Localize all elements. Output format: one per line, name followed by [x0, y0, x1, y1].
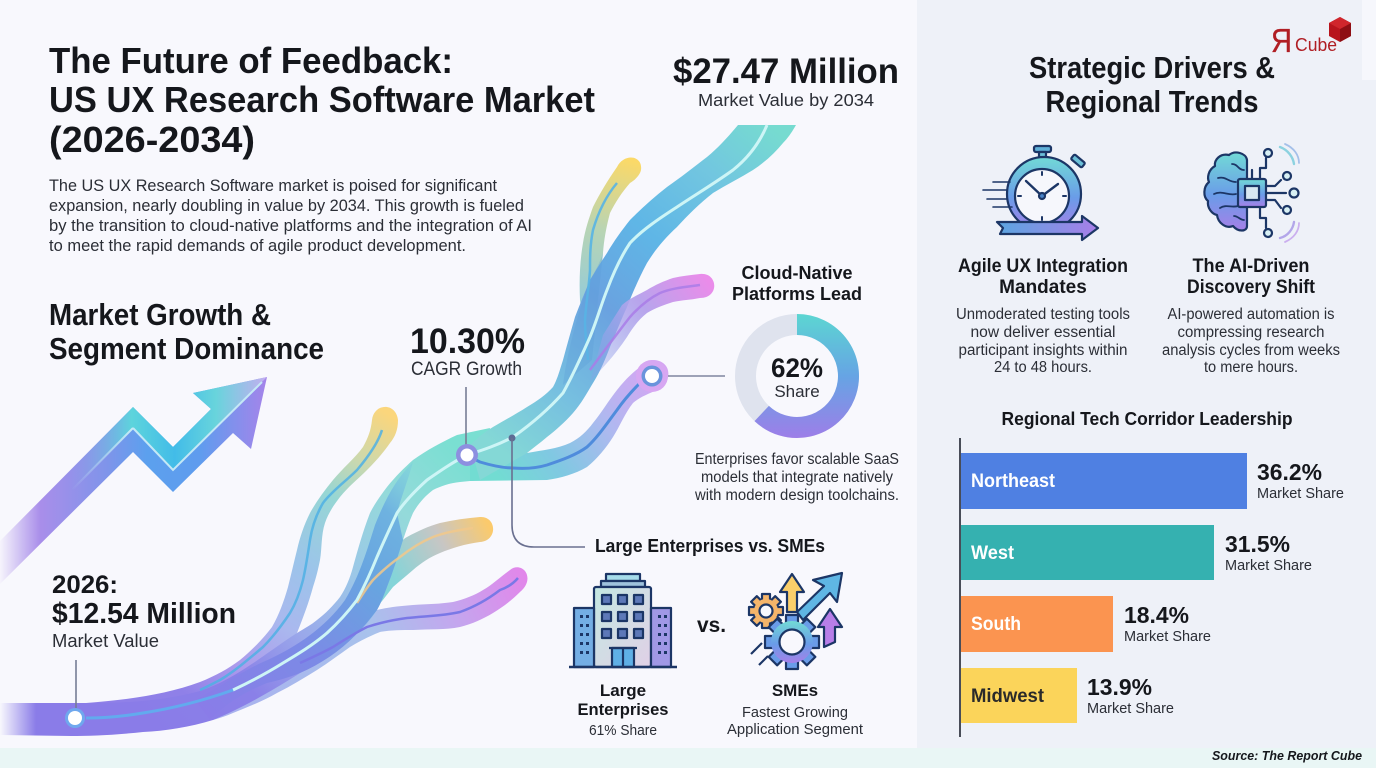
text: 2026 value: 2026:	[52, 571, 118, 599]
ribbon: left yellow branch	[86, 407, 398, 712]
ribbon: upper main	[470, 125, 796, 480]
intro text: expansion, nearly doubling in value by 2034. This growth is fueled	[49, 197, 524, 215]
text: 2026 value	[52, 571, 236, 651]
heading: strategic drivers: Regional Trends	[1046, 85, 1258, 119]
node: cloud-native marker	[636, 360, 725, 392]
ribbon: top pink branch	[590, 274, 714, 382]
driver: agile UX: now deliver essential	[970, 324, 1116, 341]
text: large enterprises	[578, 681, 668, 739]
node: CAGR marker	[456, 387, 478, 466]
ribbon: core line start	[86, 690, 233, 718]
driver: AI-driven: Discovery Shift	[1187, 277, 1316, 298]
bar: northeast	[961, 453, 1344, 509]
driver: agile UX	[956, 256, 1130, 376]
heading: market growth	[49, 297, 324, 366]
heading: cloud-native: Platforms Lead	[732, 284, 862, 304]
logo: RCube: Я	[1271, 22, 1292, 59]
text: 2034 value: $27.47 Million	[673, 52, 899, 91]
source note: Source: The Report Cube	[1212, 748, 1362, 763]
text: SMEs: Application Segment	[727, 721, 864, 738]
text: 2034 value	[673, 52, 899, 110]
heading: cloud-native: Cloud-Native	[741, 263, 853, 283]
text: 2026 value: $12.54 Million	[52, 598, 236, 630]
bar: midwest: Midwest	[971, 686, 1045, 707]
driver: AI-driven: AI-powered automation is	[1168, 306, 1335, 323]
driver: AI-driven: analysis cycles from weeks	[1162, 342, 1340, 359]
bar: west: Market Share	[1225, 557, 1312, 574]
bar chart: regional share	[960, 438, 1344, 737]
driver: AI-driven: compressing research	[1178, 324, 1324, 341]
text: enterprises favor: with modern design toolchains.	[694, 487, 899, 504]
intro text: The US UX Research Software market is poised for significant	[49, 177, 497, 195]
bar: south: Market Share	[1124, 628, 1211, 645]
text: 2034 value: Market Value by 2034	[698, 90, 874, 110]
ribbon: lower pink branch	[213, 567, 527, 720]
driver: AI-driven: The AI-Driven	[1192, 256, 1310, 277]
title: (2026-2034)	[49, 119, 255, 160]
node: 2026 marker	[65, 660, 85, 728]
text: CAGR: CAGR Growth	[411, 359, 522, 380]
bar: midwest	[961, 668, 1174, 723]
text: CAGR	[410, 322, 525, 380]
icon: growth arrow	[0, 377, 267, 584]
ribbon: bright core line	[233, 125, 767, 690]
bar: west	[961, 525, 1312, 580]
bar: northeast: 36.2%	[1257, 459, 1322, 485]
driver: AI-driven: to mere hours.	[1204, 359, 1298, 376]
connector: to enterprises vs SMEs	[508, 434, 585, 547]
bar: midwest: Market Share	[1087, 700, 1174, 717]
text: enterprises favor: Enterprises favor scalable SaaS	[695, 451, 899, 468]
ribbon: node purple branch	[470, 360, 668, 481]
intro text: by the transition to cloud-native platforms and the integration of AI	[49, 217, 532, 235]
ribbon: orange branch	[375, 517, 493, 610]
text: enterprises favor	[694, 451, 899, 504]
driver: agile UX: Mandates	[999, 277, 1087, 298]
bar: midwest: 13.9%	[1087, 674, 1152, 700]
heading: cloud-native	[732, 263, 862, 304]
text: large enterprises: Enterprises	[578, 700, 668, 719]
bar: west: West	[971, 543, 1015, 564]
ribbon: lower main	[0, 428, 490, 736]
donut chart: 62% share: 62%	[771, 353, 823, 383]
bar: south: 18.4%	[1124, 602, 1189, 628]
logo: RCube	[1271, 17, 1351, 59]
ribbon: upper overlap shade	[563, 253, 603, 385]
driver: agile UX: participant insights within	[958, 342, 1128, 359]
title	[49, 40, 595, 160]
heading: regional: Regional Tech Corridor Leadership	[1002, 408, 1292, 429]
icon: gears and growth arrows	[749, 573, 842, 669]
title: The Future of Feedback:	[49, 40, 453, 81]
bar: west: 31.5%	[1225, 531, 1290, 557]
flow ribbons chart	[0, 125, 796, 738]
text: enterprises favor: models that integrate natively	[701, 469, 893, 486]
driver: agile UX: Agile UX Integration	[958, 256, 1128, 277]
driver: agile UX: Unmoderated testing tools	[956, 306, 1130, 323]
text: vs: vs.	[697, 614, 726, 637]
bar: northeast: Northeast	[971, 471, 1056, 492]
text: SMEs	[727, 681, 864, 738]
icon: office building	[569, 574, 677, 667]
bar: south	[961, 596, 1211, 652]
ribbon: thin strand lines	[200, 183, 700, 690]
icon: stopwatch	[983, 146, 1098, 240]
donut chart: 62% share	[746, 324, 848, 428]
text: SMEs: Fastest Growing	[742, 704, 848, 721]
heading: market growth: Segment Dominance	[49, 331, 324, 366]
intro text: to meet the rapid demands of agile product development.	[49, 237, 466, 255]
heading: market growth: Market Growth &	[49, 297, 271, 332]
bar: northeast: Market Share	[1257, 485, 1344, 502]
icon: AI brain	[1204, 144, 1299, 242]
text: large enterprises: 61% Share	[589, 722, 657, 739]
title: US UX Research Software Market	[49, 79, 595, 120]
heading: strategic drivers	[1029, 51, 1275, 119]
text: 2026 value: Market Value	[52, 631, 159, 651]
driver: agile UX: 24 to 48 hours.	[994, 359, 1092, 376]
text: SMEs: SMEs	[772, 681, 818, 700]
heading: strategic drivers: Strategic Drivers &	[1029, 51, 1275, 85]
text: CAGR: 10.30%	[410, 322, 525, 361]
bar: south: South	[971, 614, 1021, 635]
ribbon: deep blue core band	[195, 462, 413, 720]
heading: large enterprises vs SMEs: Large Enterprises vs. SMEs	[595, 536, 825, 556]
intro text	[49, 177, 532, 255]
driver: AI-driven	[1162, 256, 1340, 376]
text: large enterprises: Large	[600, 681, 646, 700]
donut chart: 62% share: Share	[774, 382, 820, 401]
ribbon: left fade	[0, 700, 36, 738]
ribbon: top yellow branch	[580, 158, 641, 345]
logo: RCube: Cube	[1295, 35, 1337, 55]
